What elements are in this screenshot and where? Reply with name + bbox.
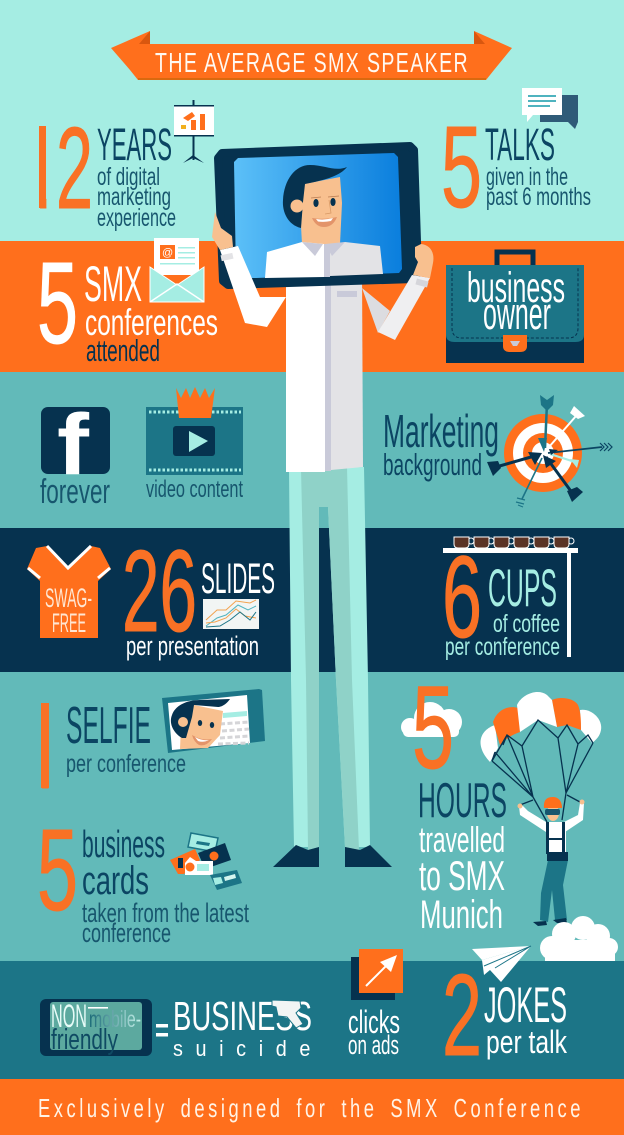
stat: 5 business cards: cards (82, 859, 149, 903)
icon: video content: video content (146, 476, 243, 503)
shroud lines (492, 720, 593, 822)
stat: 26 slides: per presentation (126, 631, 259, 661)
stat: 5 SMX conferences: 5 (37, 238, 78, 368)
stat: 5 business cards: 5 (37, 805, 78, 935)
icon: cloud behind 5 (401, 702, 462, 737)
icon: facebook forever: f (57, 397, 89, 493)
stat: 12 years: of digital (97, 163, 160, 191)
pants (289, 467, 370, 850)
icon: video content (146, 387, 243, 503)
icon: swag-free t-shirt (27, 546, 111, 638)
icon: parachutist (481, 692, 618, 961)
stat: 5 SMX conferences: attended (86, 333, 160, 368)
stat: 5 SMX conferences: SMX (84, 256, 142, 312)
equals business suicide: = (155, 1012, 169, 1048)
stat: 6 cups (442, 532, 560, 662)
stat: 12 years: experience (97, 204, 176, 232)
shirt collar and shoulders (265, 242, 383, 278)
icon: clicks on ads arrow: clicks (348, 1004, 400, 1040)
icon: business cards (170, 833, 242, 890)
stat: 5 business cards: taken from the latest (82, 898, 249, 928)
stat: 2 jokes (442, 950, 568, 1080)
stat: 5 hours (412, 662, 507, 937)
canopy (481, 692, 601, 762)
equals business suicide: suicide (173, 1036, 323, 1061)
non mobile-friendly phone (40, 998, 152, 1056)
stat: 2 jokes: per talk (486, 1024, 568, 1060)
shoes (273, 845, 392, 867)
torso (286, 270, 390, 472)
icon: clicks on ads arrow (348, 949, 403, 1060)
icon: speech bubbles (522, 88, 578, 129)
stat: 5 hours: HOURS (418, 774, 507, 828)
stat: 5 talks: 5 (441, 102, 482, 232)
stat: 5 talks: TALKS (485, 119, 555, 170)
non mobile-friendly phone: mobile- (89, 1006, 141, 1032)
icon: presentation board (174, 100, 214, 163)
icon: target with arrows (487, 395, 612, 507)
stat: 12 years: 1 (39, 103, 47, 233)
stat: 5 talks (441, 102, 591, 232)
head (283, 165, 347, 244)
icon: swag-free t-shirt: SWAG- (45, 583, 92, 613)
cloud under feet (540, 916, 618, 961)
stat: 6 cups: per conference (445, 633, 560, 661)
stat: 5 SMX conferences (37, 238, 218, 368)
icon: paper plane (472, 946, 531, 982)
stat: 5 hours: Munich (420, 893, 503, 937)
hands (212, 212, 433, 278)
business owner label (467, 264, 565, 339)
stat: 1 selfie: per conference (66, 750, 186, 778)
stat: 5 SMX conferences: conferences (85, 302, 218, 343)
equals business suicide (155, 993, 323, 1061)
icon: clicks on ads arrow: on ads (348, 1030, 399, 1060)
marketing background (383, 405, 499, 482)
icon: coffee shelf (443, 537, 578, 657)
stat: 5 hours: to SMX (419, 852, 505, 899)
stat: 1 selfie: SELFIE (66, 697, 151, 755)
stat: 1 selfie: 1 (41, 682, 49, 814)
stat: 1 selfie (41, 682, 186, 814)
non mobile-friendly phone: NON (51, 998, 87, 1034)
title ribbon (111, 31, 512, 80)
icon: envelope: @ (162, 247, 173, 259)
stat: 12 years: 2 (56, 103, 93, 233)
icon: gun (272, 1000, 303, 1028)
stat: 5 hours: travelled (419, 819, 505, 860)
non mobile-friendly phone: friendly (51, 1024, 118, 1056)
equals business suicide: BUSINESS (173, 993, 312, 1039)
stat: 12 years (39, 103, 176, 233)
stat: 5 business cards: business (82, 824, 165, 866)
stat: 5 business cards: conference (82, 918, 171, 948)
man illustration (212, 146, 433, 867)
tablet (218, 146, 418, 285)
infographic: SLIDES (201, 555, 275, 603)
stat: 5 talks: given in the (486, 163, 568, 191)
stat: 5 hours: 5 (412, 662, 454, 794)
icon: swag-free t-shirt: FREE (52, 608, 86, 638)
stat: 6 cups: 6 (442, 532, 482, 662)
title: THE AVERAGE SMX SPEAKER (155, 47, 469, 78)
stat: 12 years: YEARS (97, 119, 172, 170)
marketing background: background (383, 447, 482, 482)
arms (220, 246, 430, 340)
icon: line chart (203, 599, 259, 629)
stat: 2 jokes: 2 (442, 950, 482, 1080)
stat: 26 slides: 26 (122, 526, 197, 656)
stat: 12 years: marketing (97, 183, 171, 211)
stat: 5 business cards (37, 805, 249, 948)
skydiver body (518, 797, 584, 926)
icon: selfie phone (162, 689, 265, 753)
marketing background: Marketing (383, 405, 499, 457)
icon: envelope (150, 238, 204, 302)
stat: 6 cups: of coffee (493, 610, 560, 638)
icon: briefcase (446, 252, 584, 363)
icon: facebook forever: forever (40, 473, 110, 511)
icon: facebook forever (40, 397, 110, 511)
business owner label: owner (483, 288, 551, 339)
